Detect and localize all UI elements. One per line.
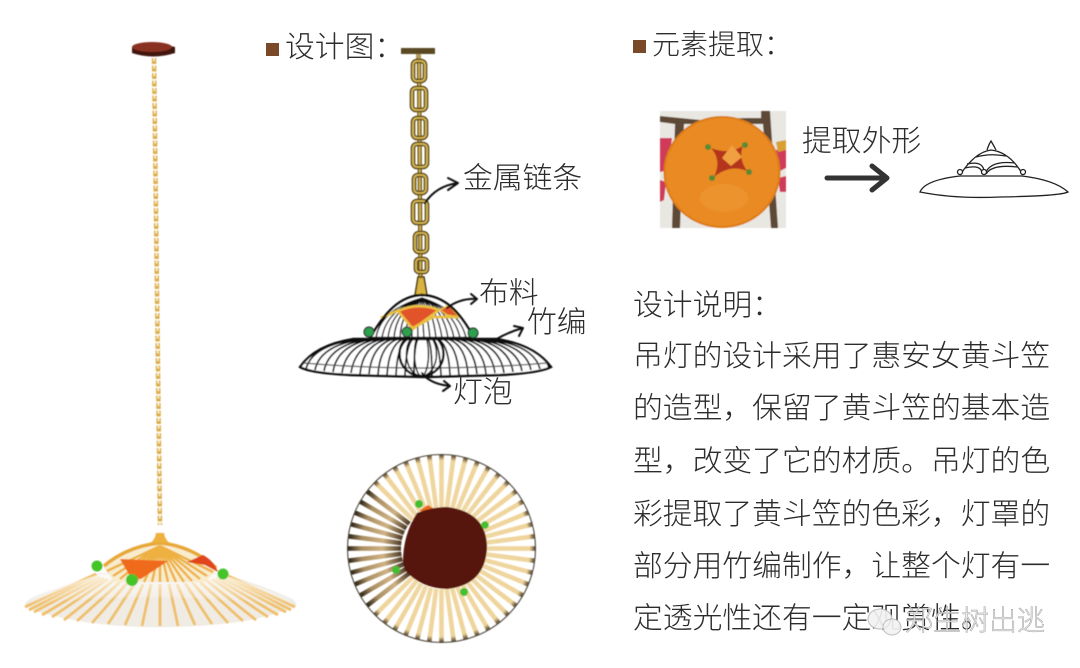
text block: design description: 定透光性还有一定观赏性。 xyxy=(633,593,991,637)
ceiling mount xyxy=(132,42,175,56)
text block: design description: 设计说明： xyxy=(633,280,782,324)
green beads xyxy=(92,560,228,586)
panel: design drawing xyxy=(297,48,551,391)
top bar xyxy=(401,48,435,59)
label: bamboo: 竹编 xyxy=(527,297,587,341)
photo: bamboo hat xyxy=(660,111,786,228)
icon: wechat xyxy=(868,609,901,635)
text block: design description: 的造型，保留了黄斗笠的基本造 xyxy=(633,383,1050,427)
green beads xyxy=(392,500,489,596)
wooden frame xyxy=(660,111,778,228)
outer rim xyxy=(348,454,536,642)
text block: design description: 彩提取了黄斗笠的色彩，灯罩的 xyxy=(633,489,1050,533)
label: fabric: 布料 xyxy=(479,268,539,312)
dome sketch xyxy=(370,295,474,338)
label: metal chain: 金属链条 xyxy=(463,153,582,197)
watermark: 郑生树出逃 xyxy=(905,599,1045,639)
panel: rendered pendant lamp xyxy=(25,42,296,627)
light bulb xyxy=(400,332,444,376)
text block: design description: 部分用竹编制作，让整个灯有一 xyxy=(633,541,1050,585)
panel: bottom view of lamp xyxy=(348,454,536,642)
fabric patches xyxy=(398,306,439,329)
metal chain xyxy=(412,58,427,295)
arrows to labels xyxy=(422,178,523,391)
heading: element extraction: 元素提取： xyxy=(652,23,792,63)
hat body xyxy=(664,117,780,227)
hat top star xyxy=(711,146,747,177)
heading: design drawing: 设计图： xyxy=(285,22,404,66)
bamboo shade sketch xyxy=(297,332,551,377)
bamboo spokes xyxy=(348,455,535,642)
label: bulb: 灯泡 xyxy=(453,367,513,411)
orange fabric tip xyxy=(420,505,436,516)
flowers xyxy=(660,138,786,202)
icon: extracted hat outline xyxy=(920,141,1068,197)
dark red centre disc xyxy=(403,507,487,589)
text block: design description xyxy=(633,280,1050,637)
green sketch beads xyxy=(364,327,478,338)
orange fabric panels xyxy=(120,559,168,579)
label: extract shape: 提取外形 xyxy=(802,116,921,160)
text block: design description: 吊灯的设计采用了惠安女黄斗笠 xyxy=(633,331,1050,375)
text block: design description: 型，改变了它的材质。吊灯的色 xyxy=(633,436,1050,480)
hat top beads xyxy=(705,142,752,181)
arrow: extract xyxy=(827,166,887,190)
lamp chain xyxy=(154,58,160,525)
lamp shade xyxy=(25,573,296,627)
lamp dome xyxy=(103,533,218,582)
